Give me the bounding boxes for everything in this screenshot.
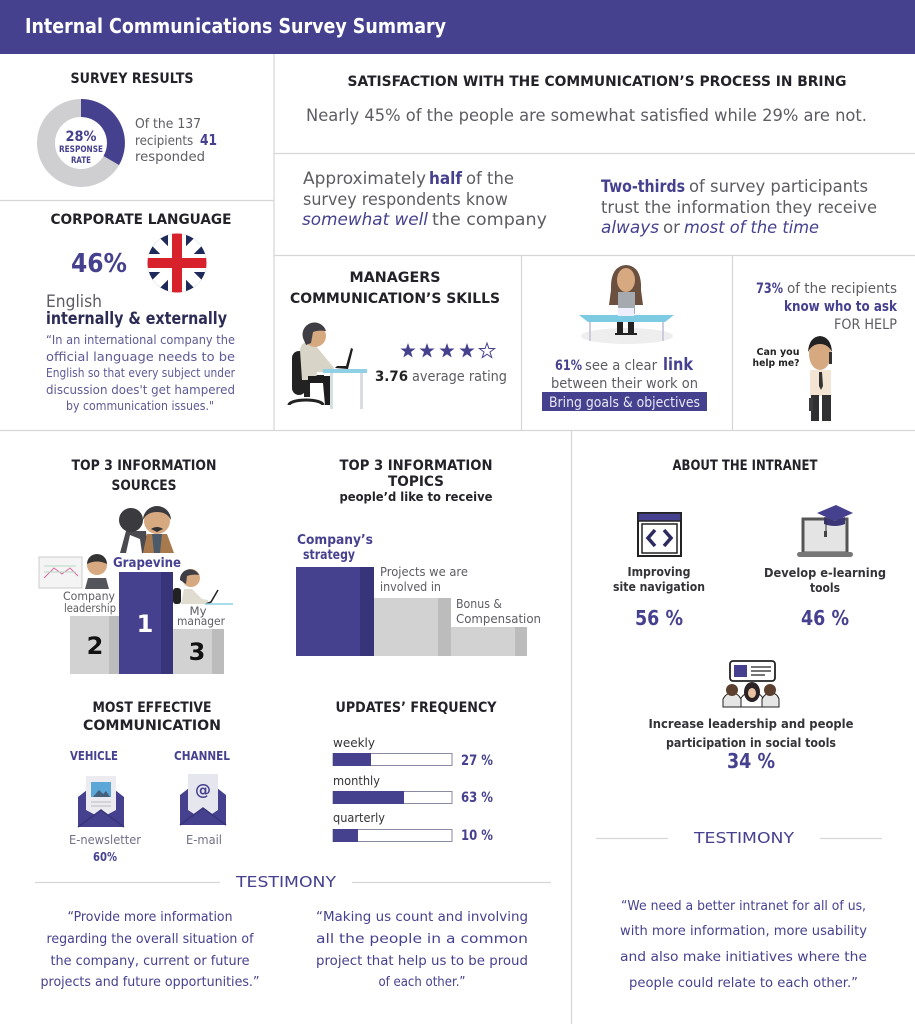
panel: top 3 information topics: [296, 458, 541, 656]
item: e-learning: Develop e-learning: [764, 565, 886, 580]
quote: count and involving: project that help us to be proud: [316, 953, 528, 969]
donut chart: response rate: 28%: [66, 129, 96, 145]
item: site navigation: [613, 513, 705, 630]
quote: better intranet: “We need a better intranet for all of us,: [621, 898, 866, 914]
heading: topics: people’d like to receive: [340, 489, 492, 504]
text: know who to ask: 73%: [756, 281, 783, 297]
heading: most effective: MOST EFFECTIVE: [92, 700, 212, 716]
panel: corporate language: [46, 212, 236, 413]
podium: rank 1: 1: [137, 610, 153, 638]
panel: survey results: [46, 71, 217, 178]
bar: company strategy: [296, 533, 374, 656]
heading: survey results: SURVEY RESULTS: [70, 71, 194, 87]
text: clear link: see a clear: [585, 358, 657, 374]
text block: half know the company: half: [429, 169, 463, 189]
donut chart: response rate: [46, 99, 125, 178]
rating stars: [400, 343, 495, 358]
bar: bonus: [451, 596, 541, 656]
item: social tools: 34 %: [727, 749, 775, 773]
bar: bonus: Compensation: [456, 611, 541, 626]
text: clear link: 61%: [555, 358, 582, 374]
bar: weekly: [333, 736, 493, 769]
text: average rating: 3.76: [375, 369, 408, 385]
bar: company strategy: Company’s: [297, 533, 373, 548]
heading: testimony left: TESTIMONY: [235, 873, 337, 891]
quote: corporate language: discussion does't get hampered: [46, 382, 235, 397]
heading: satisfaction: SATISFACTION WITH THE COMMUNICATION’S PROCESS IN BRING: [348, 74, 846, 90]
header banner: Internal Communications Survey Summary: [25, 14, 446, 38]
icon: manager at desk: [289, 322, 367, 409]
icon: email envelope: @: [195, 780, 211, 799]
text block: half know the company: survey respondents know: [303, 190, 508, 210]
label: grapevine: Grapevine: [113, 556, 181, 571]
icon: grapevine people: [119, 506, 174, 553]
heading: most effective: COMMUNICATION: [83, 718, 221, 734]
bar: projects: [374, 564, 468, 656]
text: English internally and externally: internally & externally: [46, 309, 227, 329]
label: e-newsletter: E-newsletter: [69, 832, 142, 847]
label box: Bring goals: Bring goals & objectives: [549, 395, 700, 411]
heading: testimony right: TESTIMONY: [693, 829, 795, 847]
icon: email envelope: [180, 774, 226, 825]
icon: code window: [638, 513, 681, 556]
quote: better intranet: and also make initiatives where the: [620, 949, 867, 965]
text: can you help me: Can you: [756, 347, 800, 358]
panel: who to ask: [752, 281, 898, 421]
panel: clear link: [542, 265, 707, 411]
item: site navigation: 56 %: [635, 606, 683, 630]
text block: two-thirds trust: of survey participants: [689, 177, 868, 197]
bar: bonus: Bonus &: [456, 596, 502, 611]
quote: corporate language: “In an international company the: [46, 332, 235, 347]
heading: frequency: UPDATES’ FREQUENCY: [336, 700, 497, 716]
label: e-mail: E-mail: [186, 832, 222, 847]
bar: monthly: 63 %: [461, 790, 493, 806]
text: know who to ask: of the recipients: [787, 281, 897, 297]
bar: quarterly: 10 %: [461, 828, 493, 844]
quote: count and involving: all the people in a common: [316, 931, 528, 947]
text: average rating: average rating: [412, 369, 507, 385]
item: social tools: [648, 661, 854, 773]
heading: managers skills: MANAGERS: [350, 270, 440, 286]
icon: laptop with cap: [797, 505, 853, 557]
stat: 46%: 46%: [71, 249, 127, 279]
icon: UK flag: [147, 233, 207, 293]
panel: most effective communication: [69, 700, 230, 864]
panel: testimony right: [596, 829, 882, 991]
text block: half know the company: of the: [466, 169, 514, 189]
bar: quarterly: [333, 811, 493, 844]
quote: count and involving: “Making us count and involving: [316, 909, 528, 925]
text block: two-thirds trust: always: [601, 218, 659, 238]
bar: weekly: weekly: [333, 736, 375, 750]
text: know who to ask: FOR HELP: [834, 317, 897, 333]
text: recipients: 41: [200, 131, 217, 149]
text block: half know the company: somewhat well: [302, 210, 428, 230]
text block: two-thirds trust: most of the time: [684, 218, 819, 238]
donut chart: response rate: RATE: [71, 156, 91, 166]
bar: quarterly: quarterly: [333, 811, 385, 825]
text: recipients: recipients: [135, 133, 197, 149]
text: recipients: responded: [135, 149, 205, 165]
quote: overall situation: “Provide more information: [68, 909, 232, 925]
quote: better intranet: with more information, more usability: [620, 923, 867, 939]
label: my manager: manager: [177, 614, 225, 628]
podium: rank 1: [119, 572, 173, 674]
item: e-learning: [764, 505, 886, 630]
icon: woman at desk: [579, 265, 674, 344]
bar: weekly: 27 %: [461, 753, 493, 769]
panel: testimony left: [35, 873, 551, 990]
icon: company leadership: [39, 554, 109, 589]
icon: people with speech bubble: [723, 661, 779, 707]
text: satisfaction statistic: Nearly 45% of the people are somewhat satisfied while 29% are not.: [306, 106, 867, 126]
label: company leadership: Company: [63, 589, 115, 603]
text: know who to ask: know who to ask: [784, 299, 898, 315]
text: English internally and externally: English: [46, 292, 102, 312]
panel: top 3 information sources: [39, 458, 233, 674]
text block: half know the company: the company: [432, 210, 547, 230]
bar: projects: Projects we are: [380, 564, 468, 579]
label: e-newsletter: 60%: [93, 850, 117, 864]
heading: topics: TOP 3 INFORMATION: [340, 458, 492, 474]
panel: about the intranet: [613, 458, 886, 773]
text: clear link: between their work on: [551, 376, 698, 392]
label: vehicle: VEHICLE: [70, 749, 118, 763]
panel: managers communication skills: [289, 270, 507, 409]
podium: rank 3: [173, 629, 224, 674]
bar: projects: involved in: [380, 579, 441, 594]
podium: rank 3: 3: [189, 638, 205, 666]
quote: corporate language: English so that every subject under: [46, 365, 236, 380]
heading: topics: TOPICS: [388, 474, 444, 490]
podium: rank 2: [70, 616, 119, 674]
heading: sources: TOP 3 INFORMATION: [72, 458, 216, 474]
bar: monthly: [333, 774, 493, 806]
icon: my manager: [173, 569, 233, 604]
label: channel: CHANNEL: [174, 749, 230, 763]
item: social tools: Increase leadership and people: [648, 716, 854, 731]
quote: overall situation: regarding the overall situation of: [46, 931, 255, 947]
panel: updates frequency: [333, 700, 497, 844]
heading: corporate language: CORPORATE LANGUAGE: [50, 212, 232, 228]
text block: half know the company: Approximately: [303, 169, 426, 189]
item: e-learning: tools: [810, 580, 840, 595]
item: social tools: participation in social tools: [666, 735, 836, 750]
bar: company strategy: strategy: [303, 548, 355, 563]
donut chart: response rate: RESPONSE: [59, 145, 103, 155]
text block: two-thirds trust: trust the information they receive: [601, 198, 877, 218]
quote: corporate language: by communication issues.": [66, 398, 214, 413]
text: clear link: link: [663, 355, 694, 375]
text block: two-thirds trust: or: [663, 218, 680, 238]
icon: newsletter envelope: [78, 776, 124, 827]
heading: managers skills: COMMUNICATION’S SKILLS: [290, 291, 500, 307]
icon: person on phone: [808, 336, 832, 421]
text block: two-thirds trust: Two-thirds: [601, 177, 685, 197]
label: e-newsletter: [69, 832, 142, 864]
label: my manager: My: [190, 604, 207, 618]
item: site navigation: Improving: [628, 564, 690, 579]
heading: intranet: ABOUT THE INTRANET: [672, 458, 818, 474]
header banner: [0, 0, 915, 54]
heading: sources: SOURCES: [112, 478, 176, 494]
quote: count and involving: of each other.”: [378, 974, 466, 990]
text: recipients: Of the 137: [135, 116, 201, 132]
panel: satisfaction: [306, 74, 867, 126]
text: can you help me: help me?: [752, 358, 800, 369]
label: company leadership: leadership: [64, 601, 116, 615]
quote: corporate language: official language needs to be: [46, 349, 235, 364]
item: e-learning: 46 %: [801, 606, 849, 630]
item: site navigation: site navigation: [613, 579, 705, 594]
quote: overall situation: projects and future opportunities.”: [40, 974, 260, 990]
quote: better intranet: people could relate to each other.”: [629, 975, 858, 991]
podium: rank 2: 2: [87, 632, 103, 660]
quote: overall situation: the company, current or future: [50, 953, 250, 969]
bar: monthly: monthly: [333, 774, 380, 788]
